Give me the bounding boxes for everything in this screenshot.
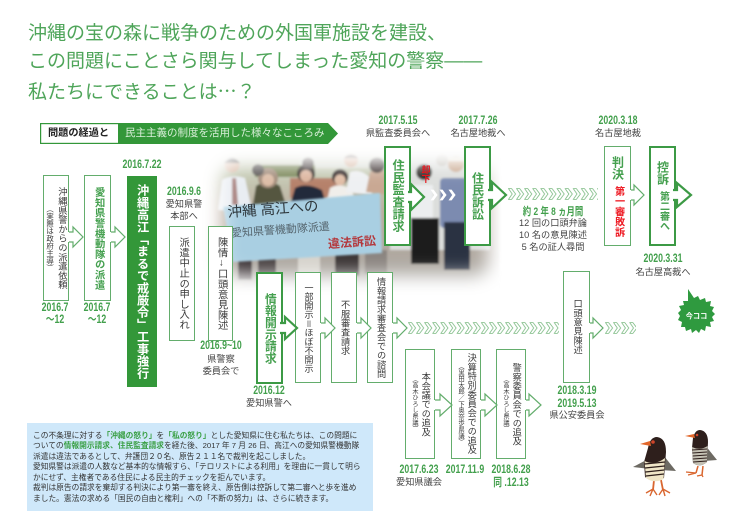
section header bar: 民主主義の制度を活用した様々なこころみ bbox=[125, 127, 324, 139]
label: 2018.6.28: 2018.6.28 bbox=[492, 464, 530, 476]
arrow bbox=[434, 394, 452, 416]
solid box: Takae works bbox=[127, 176, 157, 387]
label: 2020.3.18: 2020.3.18 bbox=[599, 115, 637, 127]
box: information disclosure request: 情報開示請求 bbox=[263, 293, 277, 363]
date: 2016.7 first: ～12 bbox=[46, 314, 64, 326]
box: information disclosure request bbox=[256, 272, 283, 384]
label: 2018.3.19 2019.5.13 bbox=[549, 385, 605, 420]
text: 2 years 8 months stats bbox=[519, 206, 587, 252]
banner bbox=[223, 193, 382, 262]
label: 2020.3.31: 2020.3.31 bbox=[644, 253, 682, 265]
box: plenary session: 本会議での追及 bbox=[420, 372, 430, 436]
label: 2017.6.23 bbox=[396, 464, 442, 487]
box: partial disclosure: 一部開示＝ほぼ不開示 bbox=[304, 282, 314, 372]
label: 2018.6.28: 同 .12.13 bbox=[493, 476, 529, 488]
label: 2017.7.26: 名古屋地裁へ bbox=[450, 128, 506, 138]
label: 2018.3.19 2019.5.13: 県公安委員会 bbox=[549, 410, 605, 420]
arrow bbox=[110, 227, 125, 247]
photo: protest march with banner bbox=[210, 154, 499, 287]
arrow: appeal bbox=[673, 183, 691, 207]
box: budget committee bbox=[451, 349, 481, 459]
burst: now here: 今ココ bbox=[686, 312, 707, 320]
arrow bbox=[480, 394, 497, 416]
box: police committee: （高木ひろし県議） bbox=[502, 376, 509, 432]
label: 2017.7.26 bbox=[450, 115, 506, 138]
panel: explanation text: 派遣は違法であるとして、弁護団２０名、原告２１１名で裁判を起こしました。 bbox=[33, 452, 310, 461]
label: 2020.3.18 bbox=[595, 115, 641, 138]
label: 2018.3.19 2019.5.13: 2019.5.13 bbox=[558, 398, 596, 410]
label: 2017.7.26: 2017.7.26 bbox=[459, 115, 497, 127]
arrow bbox=[320, 318, 335, 338]
section header bar bbox=[40, 123, 338, 144]
banner handwriting text: 沖縄 高江への bbox=[227, 199, 319, 221]
date: 2016.7 second bbox=[84, 302, 110, 326]
box: objection request bbox=[331, 272, 357, 383]
panel: explanation text: 愛知県警は派遣の人数など基本的な情報すら、「テロリストによる利用」を理由に一貫して明ら bbox=[33, 462, 361, 471]
solid box: Takae works: 沖縄高江「まるで戒厳令」工事強行 bbox=[135, 184, 149, 379]
label: 2020.3.31 bbox=[635, 253, 691, 277]
panel: explanation text: ついての情報開示請求、住民監査請求を経た後、2017 年 7 月 26 日、高江への愛知県警機動隊 bbox=[33, 441, 359, 450]
label: 2016.9.6 Aichi police HQ: 本部へ bbox=[170, 211, 198, 221]
date: 2016.7.22: 2016.7.22 bbox=[123, 159, 161, 171]
date: 2016.7 second: 2016.7 bbox=[84, 302, 110, 314]
box: oral statement bbox=[563, 271, 590, 383]
box: resident audit request: 住民監査請求 bbox=[391, 159, 405, 233]
label: 2020.3.18: 名古屋地裁 bbox=[595, 128, 641, 138]
people behind right bbox=[411, 185, 433, 219]
date: 2016.7 second: ～12 bbox=[88, 314, 106, 326]
text: 2 years 8 months stats: 10 名の意見陳述 bbox=[519, 230, 587, 240]
box: resident audit request bbox=[384, 146, 411, 246]
title: 私たちにできることは…？ bbox=[28, 77, 256, 104]
box: judgment, first instance loss bbox=[604, 146, 631, 246]
arrow bbox=[68, 227, 83, 247]
burst: now here bbox=[678, 289, 715, 333]
arrow: lawsuit bbox=[488, 182, 506, 208]
panel: explanation text: この不条理に対する「沖縄の怒り」を「私の怒り」とした愛知県に住む私たちは、この問題に bbox=[33, 430, 357, 440]
chevrons: to now bbox=[605, 322, 636, 334]
arrow: audit request bbox=[408, 184, 424, 210]
box: resident lawsuit bbox=[464, 146, 491, 246]
arrow bbox=[392, 318, 407, 338]
legs bbox=[237, 260, 253, 280]
box: appeal, second instance bbox=[649, 146, 676, 246]
label: 2016.9-10 prefectural police commission: 2016.9~10 bbox=[200, 340, 242, 352]
label: 2016.9-10 prefectural police commission bbox=[200, 340, 242, 376]
panel: explanation text: 裁判は原告の請求を棄却する判決により第一審を終え、原告側は控訴して第二審へと歩を進め bbox=[33, 483, 356, 492]
date: 2016.7 first: 2016.7 bbox=[42, 302, 68, 314]
label: 2016.9-10 prefectural police commission: 委員会で bbox=[203, 366, 239, 376]
date: 2016.7 first bbox=[42, 302, 68, 326]
box: budget committee: （黒田太郎／下奥奈歩県議） bbox=[457, 363, 464, 445]
label: 2016.12: 愛知県警へ bbox=[246, 398, 292, 408]
box: resident lawsuit: 住民訴訟 bbox=[470, 172, 484, 220]
label: 2016.12: 2016.12 bbox=[253, 385, 285, 397]
box: plenary session bbox=[405, 349, 435, 459]
label: 2017.6.23: 2017.6.23 bbox=[400, 464, 438, 476]
chevrons: middle row bbox=[408, 322, 559, 334]
arrow: judgment bbox=[630, 185, 644, 205]
box: appeal, second instance: 控訴 bbox=[656, 161, 670, 185]
banner handwriting text: 違法訴訟 bbox=[328, 234, 376, 251]
box: oral statement: 口頭意見陳述 bbox=[572, 299, 582, 355]
label: 2018.3.19 2019.5.13: 2018.3.19 bbox=[558, 385, 596, 397]
box: Okinawa police request bbox=[43, 175, 69, 301]
label: 2016.9.6 Aichi police HQ bbox=[166, 186, 202, 221]
label: 2016.9.6 Aichi police HQ: 愛知県警 bbox=[166, 199, 202, 209]
arrow: disclosure request bbox=[280, 317, 297, 339]
panel: explanation text: ました。憲法の求める「国民の自由と権利」への「不断の努力」は、さらに続きます。 bbox=[33, 494, 333, 503]
box: judgment, first instance loss: 第一審敗訴 bbox=[613, 186, 624, 236]
section header bar: 問題の経過と bbox=[48, 128, 109, 139]
panel: explanation text: かにせず、主権者である住民による民主的チェックを拒んでいます。 bbox=[33, 473, 270, 482]
label: 2017.5.15: 2017.5.15 bbox=[379, 115, 417, 127]
arrow bbox=[356, 318, 371, 338]
label: 2017.5.15 bbox=[366, 115, 430, 138]
box: request to stop dispatch: 派遣中止の申し入れ bbox=[177, 237, 188, 330]
box: plenary session: （高木ひろし県議） bbox=[411, 376, 418, 432]
text: 2 years 8 months stats: 12 回の口頭弁論 bbox=[519, 218, 587, 228]
title bbox=[28, 23, 482, 104]
arrow bbox=[588, 318, 603, 338]
label: 2016.9-10 prefectural police commission: 県警察 bbox=[207, 354, 235, 364]
label: 2020.3.31: 名古屋高裁へ bbox=[635, 267, 691, 277]
box: Aichi riot police dispatch bbox=[84, 175, 111, 301]
people bbox=[218, 176, 252, 210]
label: 2016.12 bbox=[246, 385, 292, 408]
white chevrons bbox=[430, 189, 457, 201]
box: partial disclosure bbox=[295, 272, 321, 383]
label: 2018.6.28 bbox=[492, 464, 530, 488]
panel: explanation text bbox=[27, 423, 373, 511]
box: budget committee: 決算特別委員会での追及 bbox=[466, 353, 476, 455]
banner handwriting text bbox=[227, 199, 376, 251]
chevrons: trial period bbox=[508, 188, 598, 200]
box: request to stop dispatch bbox=[169, 226, 195, 341]
box: objection request: 不服審査請求 bbox=[340, 300, 350, 355]
arrow bbox=[524, 394, 541, 416]
label: 2016.9.6 Aichi police HQ: 2016.9.6 bbox=[167, 186, 201, 198]
title: 沖縄の宝の森に戦争のための外国軍施設を建設、 bbox=[28, 23, 446, 44]
label: 2017.11.9: 2017.11.9 bbox=[446, 464, 484, 476]
box: police committee bbox=[496, 349, 526, 459]
title: この問題にことさら関与してしまった愛知の警察―― bbox=[28, 51, 482, 72]
label: 2017.6.23: 愛知県議会 bbox=[396, 477, 442, 487]
icon: small bird bbox=[685, 430, 717, 477]
label: 2017.5.15: 県監査委員会へ bbox=[366, 128, 430, 138]
box: appeal, second instance: 第二審へ bbox=[658, 191, 668, 231]
icon: large bird bbox=[633, 437, 676, 496]
box: petition and oral statement: 陳情↓口頭意見陳述 bbox=[216, 237, 227, 330]
box: Okinawa police request: 沖縄県警からの派遣依頼 bbox=[57, 187, 67, 289]
box: judgment, first instance loss: 判決 bbox=[610, 156, 624, 180]
banner handwriting text: 愛知県警機動隊派遣 bbox=[231, 221, 330, 240]
text: 2 years 8 months stats: 5 名の証人尋問 bbox=[522, 242, 584, 252]
label: dismissed: 却下 bbox=[420, 165, 430, 183]
text: 2 years 8 months stats: 約 2 年 8 ヵ月間 bbox=[523, 206, 583, 218]
box: Aichi riot police dispatch: 愛知県警機動隊の派遣 bbox=[93, 186, 104, 290]
box: review board inquiry bbox=[367, 272, 393, 383]
box: Okinawa police request: （実際は政府主導） bbox=[46, 205, 55, 271]
box: petition and oral statement bbox=[208, 226, 233, 341]
box: review board inquiry: 情報請求審査会での諮問 bbox=[376, 277, 386, 378]
box: police committee: 警察委員会での追及 bbox=[511, 363, 521, 445]
